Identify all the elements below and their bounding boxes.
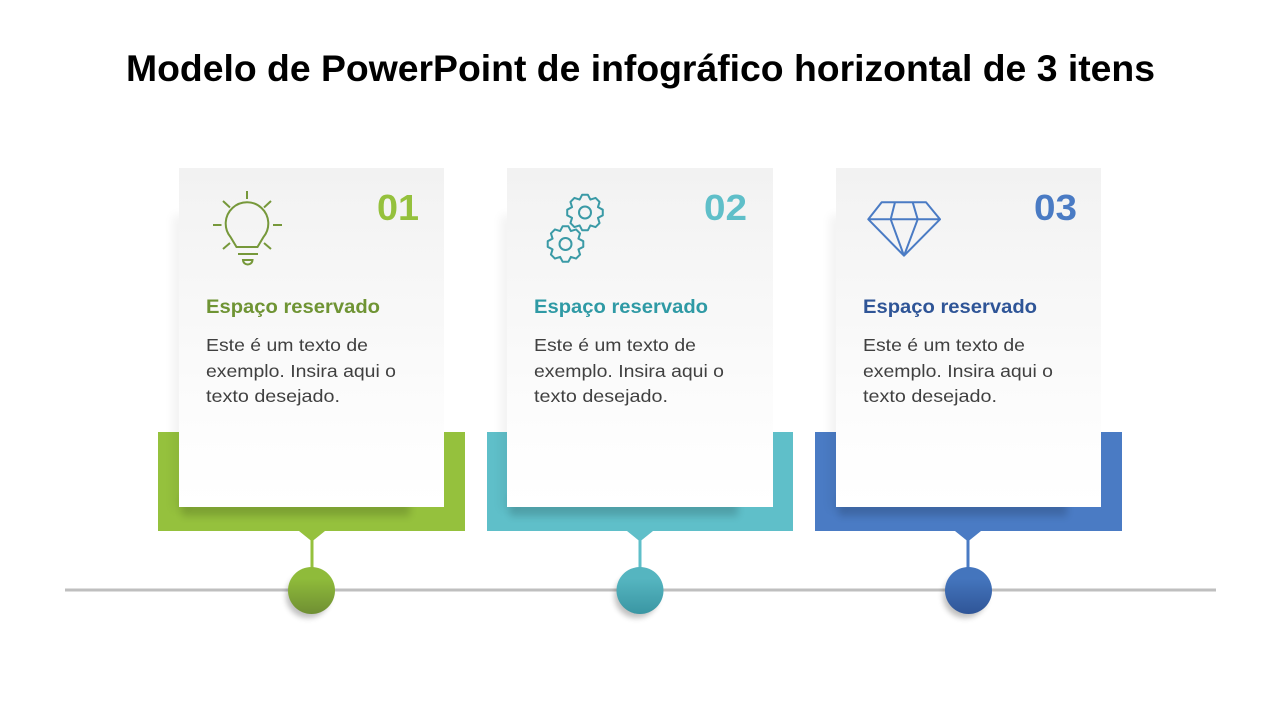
number 02: 02	[704, 187, 747, 228]
marker 02	[614, 567, 664, 618]
body text 02: texto desejado.	[534, 386, 668, 406]
panel: item 02	[487, 168, 793, 618]
heading 03: Espaço reservado	[863, 296, 1037, 318]
body text 01	[206, 335, 396, 406]
marker 03	[943, 567, 992, 618]
heading 01: Espaço reservado	[206, 296, 380, 318]
panel: item 03	[815, 168, 1122, 618]
card 01	[179, 168, 444, 507]
body text 03: texto desejado.	[863, 386, 997, 406]
number 01: 01	[377, 187, 419, 228]
card 03	[836, 168, 1101, 507]
heading 02: Espaço reservado	[534, 296, 708, 318]
marker 01	[286, 567, 335, 618]
timeline line	[65, 588, 1216, 592]
card 02	[507, 168, 773, 507]
coloured band 01	[158, 432, 465, 569]
body text 02: exemplo. Insira aqui o	[534, 361, 724, 381]
body text 01: exemplo. Insira aqui o	[206, 361, 396, 381]
body text 03	[863, 335, 1053, 406]
body text 03: exemplo. Insira aqui o	[863, 361, 1053, 381]
title: Modelo de PowerPoint de infográfico horizontal de 3 itens	[126, 48, 1155, 89]
body text 03: Este é um texto de	[863, 335, 1025, 355]
body text 02	[534, 335, 724, 406]
coloured band 02	[487, 432, 793, 569]
body text 01: texto desejado.	[206, 386, 340, 406]
body text 02: Este é um texto de	[534, 335, 696, 355]
panel: item 01	[158, 168, 465, 618]
body text 01: Este é um texto de	[206, 335, 368, 355]
icon: light bulb	[213, 191, 282, 264]
number 03: 03	[1034, 187, 1077, 228]
card shadow 03	[830, 215, 1067, 516]
icon: diamond	[868, 202, 940, 256]
coloured band 03	[815, 432, 1122, 569]
card shadow 01	[173, 215, 410, 516]
card shadow 02	[501, 215, 738, 516]
icon: gears	[548, 195, 603, 262]
